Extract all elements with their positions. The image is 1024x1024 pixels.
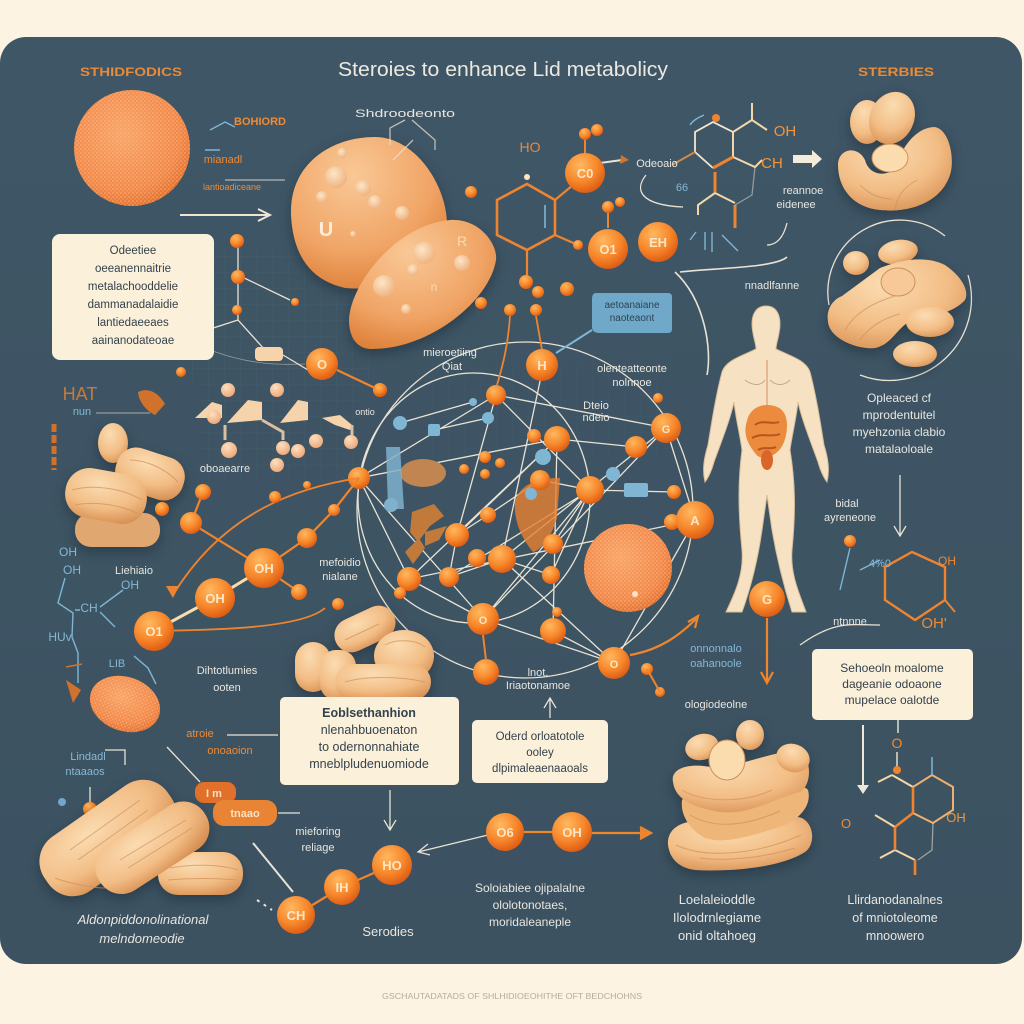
- title: Steroies to enhance Lid metabolicy: [338, 59, 668, 81]
- orange tags: I m: [206, 788, 222, 800]
- labels: lower left: onoaoion: [207, 745, 253, 757]
- heading: left: STHIDFODICS: [80, 65, 182, 79]
- potatoes: U: [319, 219, 333, 241]
- label: under potato: Qiat: [442, 361, 462, 373]
- label: bottom left nodes: mieforing: [295, 826, 341, 838]
- potatoes: n: [431, 280, 437, 294]
- icon: arrowhead near stack: [640, 828, 650, 840]
- molecule: top centre: EH: [649, 235, 667, 250]
- label: top-left small: [203, 116, 286, 192]
- label: oleogiodeine: ologiodeolne: [685, 699, 747, 711]
- molecule: left blue: HUv: [48, 630, 72, 644]
- molecule: right middle: OH': [921, 615, 947, 632]
- text box: centre right: Oderd orloatotole: [496, 731, 584, 743]
- molecule: upper left chain: O: [317, 357, 327, 372]
- label: network small: Dteio: [583, 400, 609, 412]
- label: network small: ndeio: [583, 412, 609, 424]
- text box: upper left: lantiedaeeaes: [97, 317, 169, 329]
- peanut cluster: left: [61, 423, 190, 547]
- arrow: down box: [862, 725, 864, 785]
- label: bottom lipid: Loelaleioddle: [679, 892, 755, 907]
- molecule: left blue: LIB: [109, 658, 125, 670]
- label: bottom centre: ololotonotaes,: [493, 898, 567, 912]
- label: chain: oboaearre: [200, 463, 250, 475]
- node right of centre with arrow: G: [762, 592, 772, 607]
- molecule: top right hexagon: Odeoaio: [636, 158, 678, 170]
- node labels: O: [610, 659, 619, 671]
- chain: left orange: OH: [205, 591, 225, 606]
- chain: bottom right arrow: [486, 812, 651, 852]
- labels: lower left: atroie: [186, 728, 214, 740]
- molecule: right middle: 4%0: [869, 558, 891, 570]
- right description: mprodentuitel: [863, 408, 935, 422]
- labels: lower left: ntaaaos: [65, 766, 105, 778]
- label: body top: nnadlfanne: [745, 280, 799, 292]
- arrow: down to bottom chain: [384, 790, 396, 830]
- icon: small orange chain: [52, 424, 56, 470]
- right description: myehzonia clabio: [853, 425, 946, 439]
- text box: centre right: [472, 720, 608, 783]
- label: chain mid: mefoidio: [319, 557, 361, 569]
- molecule: top centre: C0: [577, 166, 593, 181]
- node labels: H: [537, 358, 547, 373]
- potatoes: [291, 137, 496, 349]
- arrow head: down box: [857, 785, 869, 794]
- molecule: bottom right: OH: [946, 810, 966, 825]
- right description: matalaoloale: [865, 442, 933, 456]
- label: lipid right: bidal: [835, 498, 859, 510]
- label: left middle: Dihtotlumies: [197, 665, 258, 677]
- molecule: left blue: [48, 545, 156, 703]
- label: bottom right: Llirdanodanalnes: [847, 893, 943, 907]
- arrow: to peanuts top: [793, 150, 822, 168]
- chain: left orange: [134, 478, 359, 651]
- caption: bottom left: Aldonpiddonolinational: [77, 912, 210, 927]
- label: HAT: nun: [73, 406, 91, 418]
- label: potato top: Shdroodeonto: [355, 108, 455, 120]
- node right of centre with arrow: [630, 581, 785, 683]
- label: network top: nolnnoe: [612, 377, 652, 389]
- orange tags: [195, 782, 277, 826]
- molecule: left blue: OH: [121, 578, 139, 592]
- text box: right lower: dageanie odoaone: [842, 677, 942, 691]
- molecule: bottom right: [841, 720, 966, 875]
- molecule: right middle: ntnnne: [833, 616, 867, 628]
- text box: right lower: [812, 649, 973, 720]
- label: lower right of network: oahanoole: [690, 658, 742, 670]
- molecule: upper left chain: [176, 234, 386, 472]
- stacked peanuts: bottom centre: [668, 720, 814, 870]
- text box: centre left: [280, 697, 459, 785]
- label: top-left small: lantioadiceane: [203, 182, 261, 192]
- callout: blue bubble: [592, 293, 672, 333]
- chain: bottom: CH: [287, 908, 305, 923]
- text box: upper left: oeeanennaitrie: [95, 263, 171, 275]
- heading: right: STERBIES: [858, 65, 934, 79]
- text box: centre right: ooley: [526, 747, 554, 759]
- potatoes: R: [457, 233, 467, 249]
- large sphere top left: [74, 90, 190, 206]
- label: bottom lipid: onid oltahoeg: [678, 928, 756, 943]
- label: bottom right: of mniotoleome: [852, 911, 938, 925]
- network nodes: [348, 349, 714, 697]
- label: under potato: mieroetiing: [423, 347, 477, 359]
- molecule above potato: [390, 120, 435, 160]
- arrow: down right: [894, 475, 906, 536]
- node labels: G: [662, 424, 670, 436]
- chain: bottom: [253, 843, 412, 934]
- label: bottom left nodes: reliage: [301, 842, 335, 854]
- peanut cluster in circle: [828, 220, 971, 380]
- labels: lower left: Lindadl: [70, 751, 106, 763]
- molecule: bottom right: O: [841, 816, 851, 831]
- labels: lower left: [58, 728, 300, 816]
- molecule: top right hexagon: CH: [761, 155, 783, 172]
- curved arrow: [767, 223, 787, 245]
- chain: left orange: OH: [254, 561, 274, 576]
- text box: centre right: dlpimaleaenaaoals: [492, 763, 588, 775]
- label: under network: lnot.: [528, 667, 548, 679]
- molecule: top right hexagon: [636, 103, 796, 252]
- label: chain mid: nialane: [322, 571, 358, 583]
- text box: centre left: to odernonnahiate: [319, 740, 419, 754]
- text box: right lower: mupelace oalotde: [845, 693, 940, 707]
- node labels: O: [479, 615, 488, 627]
- orange tags: tnaao: [230, 808, 260, 820]
- node labels: [479, 358, 700, 671]
- label: top-left small: mianadl: [204, 154, 242, 166]
- text box: upper left: dammanadalaidie: [88, 299, 178, 311]
- text box: upper left: aainanodateoae: [92, 335, 174, 347]
- callout: blue bubble: naoteaont: [610, 313, 654, 324]
- molecule: right middle: [800, 535, 956, 645]
- label: chain right: ontio: [355, 407, 375, 417]
- molecule: top centre: O1: [599, 242, 617, 257]
- arrow: chain to bottom node: [418, 835, 488, 855]
- text box: upper left: [52, 234, 214, 360]
- peanut cluster: centre: [295, 600, 434, 700]
- caption: bottom left: melndomeodie: [99, 931, 185, 946]
- molecule: top right hexagon: OH: [774, 123, 796, 140]
- label: HAT: HAT: [63, 384, 97, 404]
- molecule: right middle: OH: [938, 554, 956, 568]
- text box: upper left: Odeetiee: [110, 245, 156, 257]
- central cell: [400, 459, 446, 487]
- label: HAT: [63, 384, 165, 418]
- text box: centre left: mneblpludenuomiode: [309, 757, 429, 771]
- molecule: top centre: HO: [520, 139, 541, 155]
- label: network top: olenteatteonte: [597, 363, 667, 375]
- label: left middle: ooten: [213, 682, 241, 694]
- text box: upper left: metalachooddelie: [88, 281, 178, 293]
- label: under network: Iriaotonamoe: [506, 680, 570, 692]
- label: top right small: eidenee: [776, 199, 816, 211]
- text box: centre left: Eoblsethanhion: [322, 706, 416, 720]
- text box: centre left: nlenahbuoenaton: [321, 723, 417, 737]
- molecule: bottom right: O: [892, 735, 903, 751]
- node labels: A: [690, 513, 700, 528]
- body figure: [704, 306, 828, 612]
- label: top-left small: BOHIORD: [234, 116, 286, 128]
- sphere centre right: [584, 524, 672, 612]
- label: bottom lipid: Ilolodrnlegiame: [673, 910, 761, 925]
- label: chain left: Liehiaio: [115, 565, 153, 577]
- callout: blue bubble: aetoanaiane: [604, 300, 660, 311]
- small oval left: [82, 666, 168, 742]
- molecule: top centre: [465, 124, 678, 385]
- footer: GSCHAUTADATADS OF SHLHIDIOEOHITHE OFT BEDCHOHNS: [382, 992, 642, 1001]
- chain: left orange: O1: [145, 624, 163, 639]
- label: Serodies: Serodies: [362, 924, 414, 939]
- network diagram: [357, 342, 695, 678]
- label: bottom centre: Soloiabiee ojipalalne: [475, 881, 585, 895]
- peanut cluster: bottom left: [28, 768, 243, 908]
- chain: bottom right arrow: O6: [496, 825, 514, 840]
- arrow: up from box: [544, 698, 556, 718]
- chain: bottom: HO: [382, 858, 402, 873]
- molecule: left blue: OH: [59, 545, 77, 559]
- text box: right lower: Sehoeoln moalome: [840, 661, 944, 675]
- chain: bottom: IH: [336, 880, 348, 895]
- chain: bottom right arrow: OH: [562, 825, 582, 840]
- label: bottom centre: moridaleaneple: [489, 915, 571, 929]
- label: lower right of network: onnonnalo: [690, 643, 742, 655]
- molecule: left blue: OH: [63, 563, 81, 577]
- right description: Opleaced cf: [867, 391, 932, 405]
- label: top right small: reannoe: [783, 185, 823, 197]
- label: bottom right: mnoowero: [866, 929, 924, 943]
- molecule: top right hexagon: 66: [676, 182, 688, 194]
- label: lipid right: ayreneone: [824, 512, 876, 524]
- arrow: from sphere: [180, 209, 270, 221]
- peanut cluster: top right: [838, 84, 952, 211]
- molecule: left blue: CH: [80, 601, 98, 615]
